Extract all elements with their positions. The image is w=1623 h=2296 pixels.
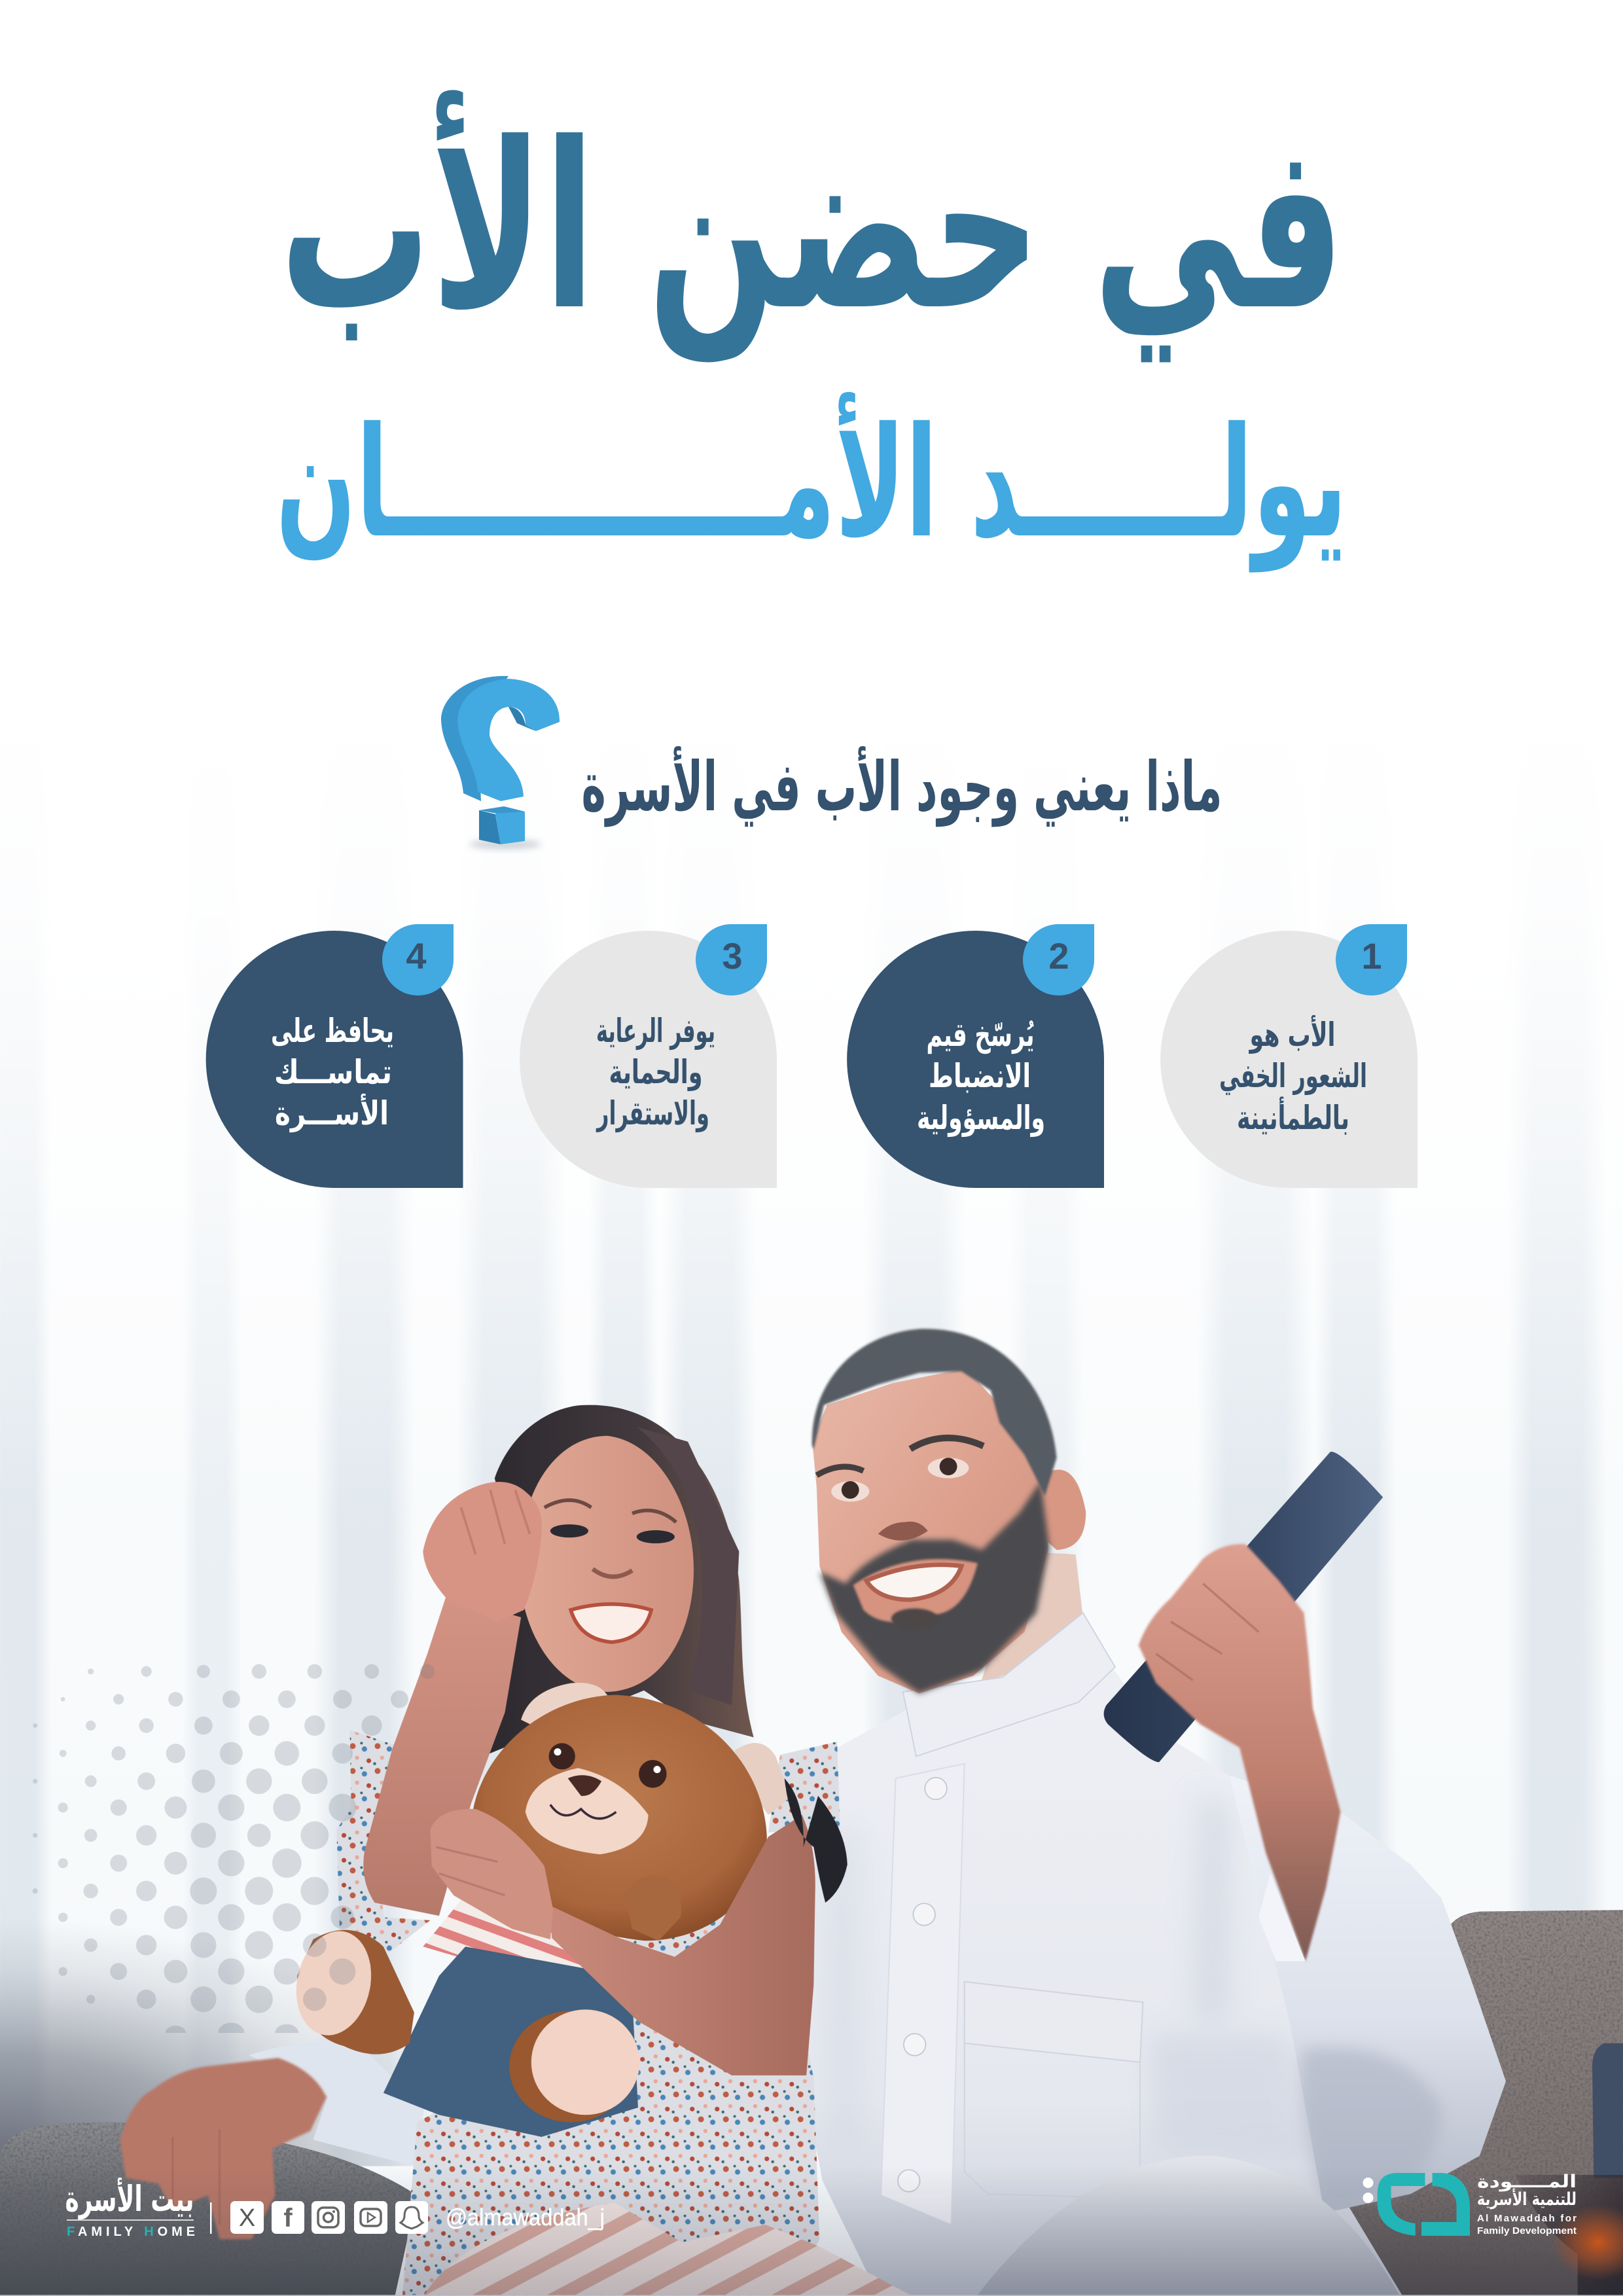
- teddy face details: [549, 1743, 667, 1819]
- mouth: [866, 1565, 961, 1600]
- logo: Family Home: [65, 2178, 195, 2239]
- face: [812, 1369, 1049, 1693]
- card 3 text: [596, 1012, 715, 1133]
- teddy left foot: [297, 1930, 414, 2054]
- man eyes and brows: [817, 1438, 984, 1541]
- teddy right foot: [509, 2011, 632, 2122]
- man: [120, 1329, 1506, 2295]
- remote control: [1104, 1452, 1383, 1762]
- thobe torso: [798, 1640, 1402, 2295]
- ponytail: [785, 1778, 847, 1903]
- blue pillow: [1592, 2043, 1623, 2178]
- photo: father and daughter on a sofa: [0, 701, 1623, 2296]
- face: [519, 1436, 694, 1692]
- card 2 text: الانضباط: [929, 1057, 1031, 1095]
- logo: Family Home: بيت الأسرة: [65, 2178, 194, 2219]
- sleeve inner folds: [1301, 2047, 1442, 2202]
- sleeve cuff under arm: [1258, 1873, 1306, 1962]
- dark table corner: [1516, 2175, 1623, 2295]
- buttons: [898, 1778, 947, 2192]
- fist: [423, 1482, 542, 1622]
- card 2 text: يُرسّخ قيم: [927, 1016, 1034, 1054]
- hair strand over face: [637, 1427, 739, 1705]
- striped pants: [424, 2202, 910, 2295]
- teddy small arm: [625, 1875, 681, 1941]
- icon: Facebook: f: [283, 2204, 293, 2233]
- left sleeve: [249, 2037, 424, 2166]
- teddy muzzle: [526, 1768, 649, 1854]
- teddy body shirt: [423, 1873, 630, 1984]
- badge 4: [382, 924, 454, 996]
- left hand: [120, 2058, 327, 2239]
- card 2 text: والمسؤولية: [917, 1099, 1045, 1138]
- panel: card 3: [520, 924, 777, 1188]
- hair back: [476, 1405, 754, 1759]
- lower-left haze over curtain: [0, 1917, 483, 2166]
- card 3 text: والاستقرار: [596, 1094, 709, 1133]
- hair: [812, 1329, 1057, 1496]
- teddy left ear: [521, 1683, 609, 1730]
- handle: @almawaddah_j: [446, 2204, 605, 2231]
- logo text: Al Mawaddah for: [1477, 2213, 1577, 2224]
- neck: [980, 1551, 1083, 1683]
- hand on teddy: [430, 1809, 553, 1939]
- social icons: [230, 2201, 428, 2234]
- logo text: المـــــودة: [1477, 2172, 1577, 2192]
- badge 2: [1023, 924, 1094, 996]
- card 1 text: بالطمأنينة: [1237, 1096, 1349, 1137]
- card 3 text: يوفر الرعاية: [596, 1012, 715, 1050]
- dress ruffle right: [768, 1742, 840, 1833]
- card 4 text: [271, 1012, 394, 1133]
- orange glow: [1551, 2204, 1623, 2280]
- number 3: 3: [722, 935, 743, 977]
- raised hand and forearm: [1139, 1544, 1340, 1962]
- sofa left: [0, 2122, 417, 2295]
- lower arm: [550, 1815, 815, 2075]
- icon: YouTube: [354, 2201, 387, 2234]
- raised sleeve: [1229, 1776, 1506, 2213]
- panel: card 4: [206, 924, 463, 1188]
- curtain backdrop: [0, 701, 1623, 2166]
- ear: [1042, 1469, 1086, 1550]
- card 3 text: والحماية: [609, 1053, 703, 1092]
- raised arm: [363, 1595, 521, 1916]
- card 4 text: يحافظ على: [271, 1012, 394, 1050]
- knee: [978, 2155, 1399, 2295]
- sofa right: [1317, 1910, 1623, 2295]
- logo text: [1477, 2172, 1577, 2236]
- question block: [441, 676, 1222, 850]
- panel: card 2: [847, 924, 1104, 1188]
- teddy right ear: [735, 1743, 791, 1815]
- skirt: [402, 1888, 819, 2295]
- logo mark: [1363, 2173, 1470, 2236]
- icon: Instagram: [312, 2201, 345, 2234]
- badge 3: [696, 924, 767, 996]
- placket: [881, 1764, 965, 2225]
- beard: [819, 1481, 1049, 1693]
- icon: 3D question mark: [441, 676, 560, 850]
- collar: [903, 1613, 1115, 1756]
- question heading: ماذا يعني وجود الأب في الأسرة: [581, 746, 1222, 827]
- pocket: [965, 1982, 1143, 2198]
- badge 1: [1336, 924, 1407, 996]
- card 1 text: الشعور الخفي: [1219, 1057, 1367, 1096]
- icon: X: [230, 2201, 264, 2234]
- number 1: 1: [1361, 935, 1382, 977]
- dress ruffle left: [336, 1730, 430, 1952]
- card 2 text: [917, 1016, 1045, 1138]
- panel: card 1: [1160, 924, 1418, 1188]
- card 1 text: [1219, 1014, 1367, 1137]
- chin skin around mouth: [853, 1559, 978, 1622]
- eyes and brows: [544, 1500, 676, 1577]
- number 4: 4: [406, 935, 427, 977]
- teddy head: [471, 1695, 767, 1941]
- title: [276, 88, 1347, 573]
- number 2: 2: [1048, 935, 1069, 977]
- divider: [210, 2202, 212, 2234]
- teddy overalls: [383, 1946, 638, 2137]
- logo text: Family Development: [1477, 2225, 1577, 2236]
- icon: Snapchat: [395, 2201, 428, 2234]
- card 1 text: الأب هو: [1248, 1014, 1335, 1054]
- icon: Facebook: [272, 2201, 304, 2234]
- bottom shade: [0, 2166, 1623, 2296]
- thobe shading folds: [819, 1793, 1317, 2166]
- logo text: للتنمية الأسرية: [1477, 2188, 1577, 2210]
- card 4 text: الأســـرة: [275, 1093, 389, 1133]
- halftone dots: [33, 1664, 435, 2033]
- mouth: [571, 1604, 651, 1642]
- icon: X: X: [239, 2204, 255, 2232]
- soul patch: [891, 1609, 938, 1629]
- girl: [287, 1405, 910, 2295]
- logo: Al Mawaddah: [1363, 2172, 1577, 2236]
- card 4 text: تماســـك: [274, 1053, 392, 1091]
- logo: Family Home: F AMILY H OME: [67, 2225, 195, 2239]
